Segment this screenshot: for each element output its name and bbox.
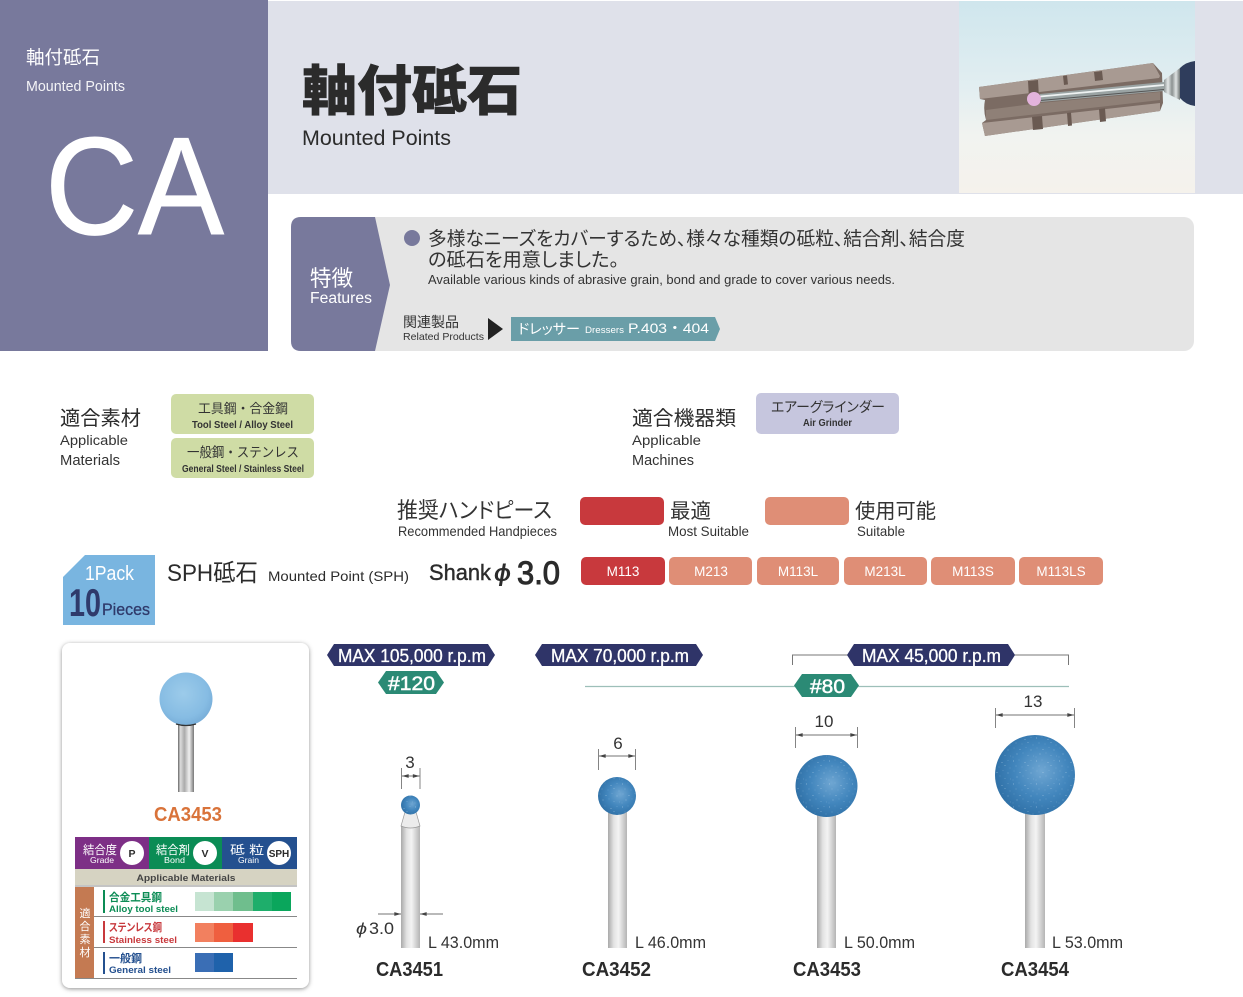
machines English line 2: Machines — [632, 453, 694, 469]
main title — [302, 62, 522, 150]
shank size: ϕ — [494, 560, 511, 587]
product code: CA3453 — [154, 804, 222, 826]
handpiece chips: M113S — [952, 564, 994, 579]
spec header: grain — [222, 837, 297, 869]
vertical materials label: 材 — [80, 945, 90, 959]
feature text line 2: の砥石を用意しました。 — [428, 249, 619, 271]
abrasive head — [401, 796, 420, 814]
legend: most suitable — [580, 497, 749, 539]
feature text line 1: 多様なニーズをカバーするため、様々な種類の砥粒、結合剤、結合度 — [428, 228, 965, 250]
legend: suitable: 使用可能 — [855, 500, 936, 523]
model number: CA3453 — [793, 959, 861, 981]
speed badge: 45,000 rpm: MAX 45,000 r.p.m — [862, 646, 1001, 666]
row: stainless steel: Stainless steel — [109, 935, 177, 946]
machine tag: air grinder: エアーグラインダー — [771, 399, 885, 415]
handpiece chips: M113LS — [1036, 564, 1086, 579]
spec header: grade: P — [128, 848, 136, 860]
abrasive head — [598, 777, 636, 815]
shank dimension: 3.0 — [369, 919, 394, 938]
related products label: 関連製品 — [403, 314, 459, 330]
shaft — [1025, 805, 1045, 948]
applicable materials heading: 適合素材 — [60, 407, 141, 430]
pack badge: Pieces — [102, 600, 150, 619]
tool CA3454 — [995, 692, 1123, 981]
material tag: general steel — [171, 438, 314, 478]
shank size — [429, 555, 560, 591]
material tag: tool steel: Tool Steel / Alloy Steel — [192, 420, 293, 431]
recommended handpieces heading: Recommended Handpieces — [398, 523, 557, 539]
material tag: general steel: 一般鋼・ステンレス — [187, 445, 299, 460]
features label: 特徴 — [310, 266, 353, 291]
row: general steel: 一般鋼 — [109, 951, 142, 965]
row: alloy tool steel: Alloy tool steel — [109, 904, 178, 915]
spec header: grade: Grade — [90, 855, 114, 865]
grit badge: #80 — [794, 674, 859, 698]
vertical materials label: 合 — [80, 920, 90, 933]
material tag: general steel: General Steel / Stainless Steel — [182, 464, 304, 475]
pack badge — [63, 555, 155, 625]
row: alloy tool steel — [103, 890, 291, 915]
vertical materials label: 素 — [80, 933, 90, 946]
recommended handpieces heading: 推奨ハンドピース — [397, 498, 552, 523]
legend: most suitable: Most Suitable — [668, 523, 749, 539]
features tab — [291, 217, 390, 351]
main title: 軸付砥石 — [302, 62, 522, 122]
category name Japanese: 軸付砥石 — [26, 47, 100, 68]
length: L 43.0mm — [428, 933, 499, 952]
applicable machines heading: 適合機器類 — [632, 407, 736, 430]
diameter dimension — [796, 712, 858, 748]
spec header: grade — [75, 837, 149, 869]
shank dimension — [356, 914, 443, 938]
spec header: grain: SPH — [269, 849, 289, 860]
features label English: Features — [310, 290, 372, 307]
legend: most suitable: 最適 — [670, 500, 711, 523]
shank dimension: ϕ — [356, 921, 367, 938]
grit badge: #120: #120 — [388, 674, 435, 695]
legend: suitable — [765, 497, 936, 539]
machines English line 1: Applicable — [632, 433, 701, 448]
speed badge: 105,000 rpm: MAX 105,000 r.p.m — [338, 646, 486, 666]
arrow — [488, 318, 503, 340]
spec header: bond: V — [201, 848, 209, 860]
main subtitle: Mounted Points — [302, 127, 451, 150]
product card — [62, 643, 309, 988]
handpiece chips — [581, 557, 1103, 585]
heading English line 1: Applicable — [60, 433, 128, 448]
bullet — [404, 230, 420, 246]
tag text English: Dressers — [585, 325, 625, 335]
length: L 46.0mm — [635, 933, 706, 952]
row: alloy tool steel: 合金工具鋼 — [109, 890, 162, 904]
spec header: bond: 結合剤 — [156, 843, 190, 857]
vertical materials label — [75, 887, 94, 978]
row: stainless steel: ステンレス鋼 — [109, 920, 162, 934]
diameter dimension: 13 — [1024, 692, 1042, 711]
feature text English: Available various kinds of abrasive grain, bond and grade to cover various needs. — [428, 273, 895, 287]
related products tag — [511, 317, 720, 341]
spec header: bond: Bond — [164, 855, 185, 865]
vertical materials label: 適 — [80, 906, 90, 920]
length: L 53.0mm — [1052, 933, 1123, 952]
tool CA3452 — [582, 734, 706, 981]
shaft — [608, 810, 627, 948]
row: stainless steel — [103, 920, 253, 946]
related products label English: Related Products — [403, 331, 484, 343]
applicable machines heading — [632, 407, 736, 469]
left category panel — [0, 0, 268, 351]
abrasive head — [796, 755, 858, 817]
handpiece chips: M213L — [864, 564, 906, 579]
handpiece chips: M113L — [778, 564, 819, 579]
shaft — [401, 826, 420, 948]
spec header: bond — [149, 837, 222, 869]
header photo: grinding a workpiece — [959, 1, 1195, 193]
applicable materials heading — [60, 407, 141, 469]
shank size: 3.0 — [517, 555, 560, 591]
handpiece chips: M213 — [694, 564, 728, 579]
row: general steel — [103, 951, 233, 976]
tool CA3453 — [793, 712, 915, 981]
legend: suitable: Suitable — [857, 523, 905, 539]
grit badge: #120 — [378, 671, 444, 695]
product photo — [160, 672, 212, 792]
category name English: Mounted Points — [26, 78, 125, 95]
model number: CA3452 — [582, 959, 651, 981]
pack badge: 1Pack — [85, 563, 135, 585]
grit badge: #80: #80 — [810, 677, 845, 698]
diameter dimension — [996, 692, 1074, 728]
applicable materials band: Applicable Materials — [136, 873, 236, 884]
length: L 50.0mm — [844, 933, 915, 952]
pack badge: 10 — [69, 582, 101, 625]
model number: CA3454 — [1001, 959, 1070, 981]
material tag: tool steel: 工具鋼・合金鋼 — [198, 401, 288, 416]
tag page reference: P.403・404 — [628, 320, 709, 336]
tool CA3451 — [356, 753, 499, 981]
product line title: Mounted Point (SPH) — [268, 568, 409, 584]
handpiece chips: M113 — [607, 564, 639, 579]
product line title: SPH砥石 — [167, 560, 258, 587]
shaft — [817, 810, 836, 948]
material tag: tool steel — [171, 394, 314, 434]
spec header: grain: Grain — [238, 855, 259, 865]
tag text: ドレッサー — [518, 321, 580, 337]
diameter dimension — [402, 753, 420, 789]
heading English line 2: Materials — [60, 453, 120, 469]
header band — [268, 1, 1243, 194]
applicable materials band — [75, 869, 297, 885]
speed badge: 70,000 rpm: MAX 70,000 r.p.m — [551, 646, 689, 666]
diameter dimension: 6 — [613, 734, 623, 753]
neck — [401, 812, 420, 828]
shank size: Shank — [429, 560, 492, 585]
features panel — [291, 217, 1194, 351]
abrasive head — [995, 735, 1075, 815]
row: general steel: General steel — [109, 965, 171, 976]
spec header: grade: 結合度 — [83, 843, 117, 857]
category code CA: CA — [45, 109, 224, 264]
model number: CA3451 — [376, 959, 443, 981]
diameter dimension: 3 — [405, 753, 415, 772]
product line title — [167, 560, 409, 587]
machine tag: air grinder — [756, 393, 899, 434]
spec header: grain: 砥 粒 — [230, 842, 264, 857]
diameter dimension — [598, 734, 636, 770]
machine tag: air grinder: Air Grinder — [803, 418, 852, 429]
recommended handpieces heading — [397, 498, 557, 539]
diameter dimension: 10 — [815, 712, 833, 731]
